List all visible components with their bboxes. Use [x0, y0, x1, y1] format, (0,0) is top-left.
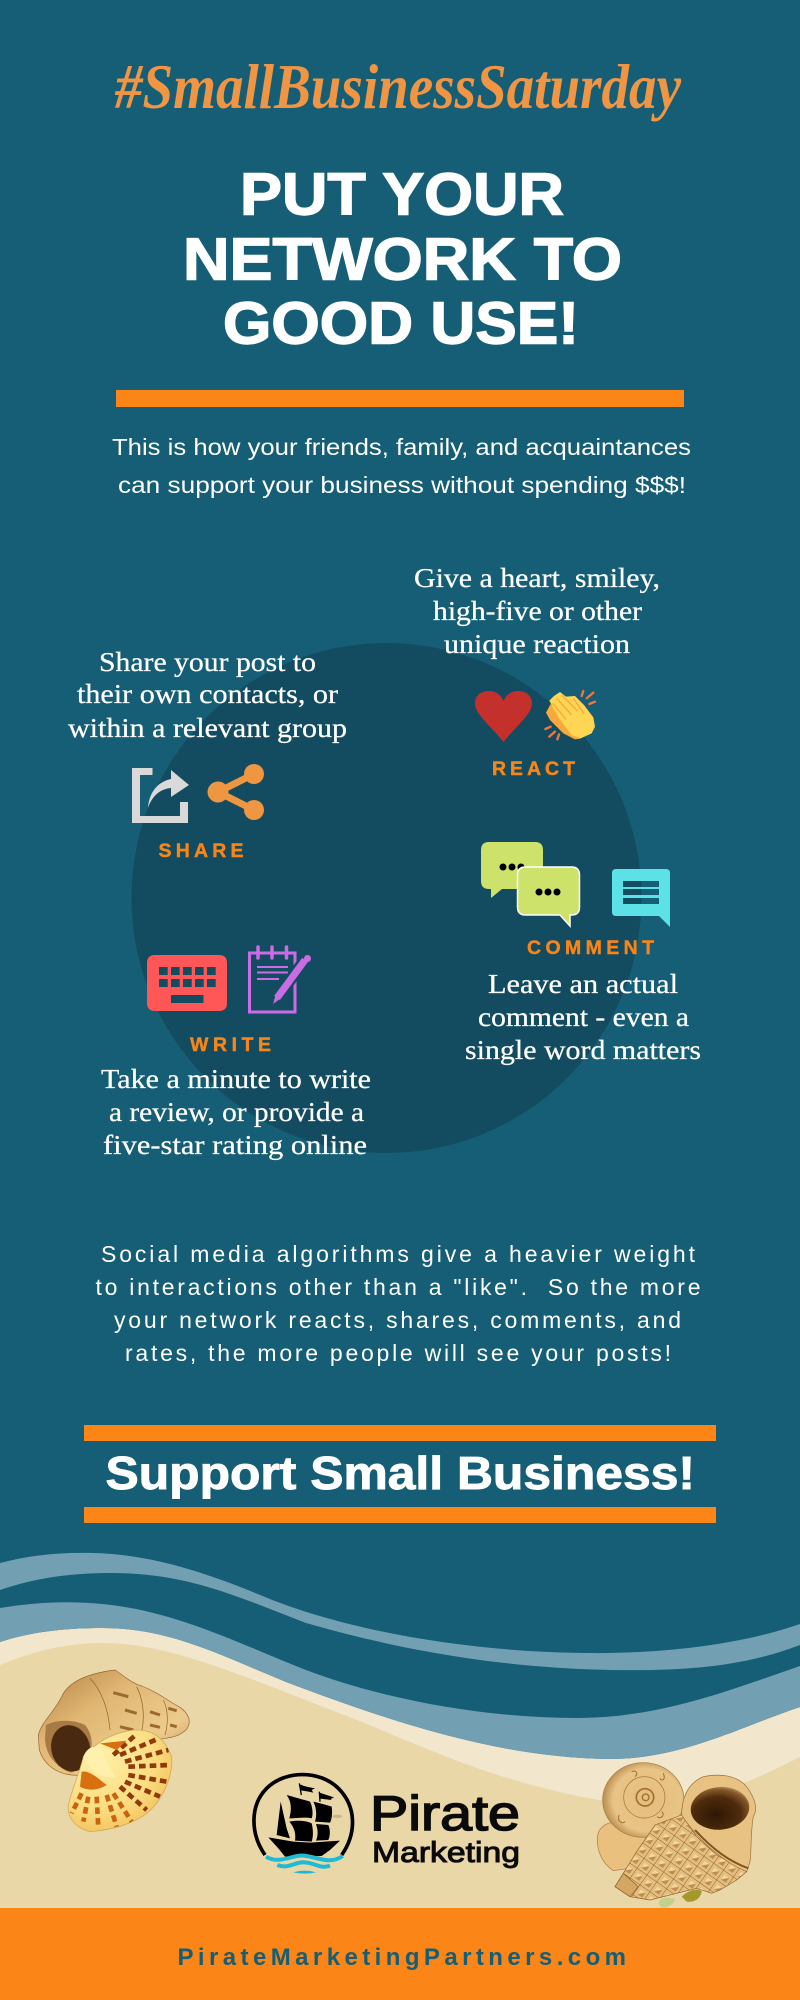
- logo: Pirate Marketing: [254, 1775, 520, 1874]
- panel: comment: [465, 842, 701, 1065]
- title divider: [116, 390, 684, 407]
- hashtag heading: #SmallBusinessSaturday: [114, 51, 682, 122]
- write description: [101, 1064, 371, 1160]
- icon: heart: [475, 691, 532, 742]
- comment description: single word matters: [465, 1035, 701, 1065]
- write description: a review, or provide a: [109, 1097, 364, 1127]
- algorithm explanation text: Social media algorithms give a heavier weight: [101, 1241, 696, 1267]
- shell: left snail and clam: [38, 1670, 189, 1832]
- comment description: comment - even a: [478, 1002, 689, 1032]
- react description: high-five or other: [433, 596, 642, 626]
- share label: SHARE: [158, 840, 244, 862]
- algorithm explanation text: rates, the more people will see your posts!: [125, 1340, 671, 1366]
- comment description: Leave an actual: [488, 969, 678, 999]
- share description: [68, 647, 347, 743]
- icon: notepad and pencil: [250, 947, 311, 1012]
- react description: Give a heart, smiley,: [414, 563, 660, 593]
- panel: share: [68, 647, 347, 862]
- lower blue wave: [0, 1602, 800, 1759]
- react label: REACT: [492, 758, 575, 780]
- share description: their own contacts, or: [77, 679, 338, 709]
- beach waves: [0, 1553, 800, 1910]
- algorithm explanation text: your network reacts, shares, comments, and: [114, 1307, 681, 1333]
- title: GOOD USE!: [223, 290, 579, 356]
- react description: unique reaction: [444, 629, 631, 659]
- comment label: COMMENT: [527, 937, 654, 959]
- support banner: [84, 1425, 716, 1523]
- react description: [414, 563, 660, 659]
- write description: five-star rating online: [103, 1130, 367, 1160]
- logo wordmark: [370, 1787, 520, 1869]
- intro text: This is how your friends, family, and acquaintances: [112, 434, 691, 460]
- foam: [0, 1628, 800, 1910]
- write label: WRITE: [190, 1034, 271, 1056]
- share description: within a relevant group: [68, 713, 347, 743]
- title: NETWORK TO: [183, 226, 622, 292]
- algorithm explanation text: [96, 1241, 700, 1366]
- share description: Share your post to: [99, 647, 316, 677]
- support banner: Support Small Business!: [106, 1447, 695, 1499]
- sand: [0, 1643, 800, 1910]
- upper blue wave: [0, 1553, 800, 1670]
- logo emblem: ship: [254, 1775, 353, 1874]
- intro text: can support your business without spending $$$!: [118, 472, 686, 498]
- panel: react: [414, 563, 660, 780]
- algorithm explanation text: to interactions other than a "like". So the more: [96, 1274, 700, 1300]
- icon: blue speech bubble: [612, 869, 670, 927]
- title: [183, 162, 622, 356]
- panel: write: [101, 947, 371, 1160]
- central circle: [132, 643, 642, 1153]
- shell: right conch pair: [597, 1763, 756, 1908]
- logo wordmark: Marketing: [372, 1837, 520, 1869]
- comment description: [465, 969, 701, 1065]
- logo wordmark: Pirate: [370, 1787, 520, 1841]
- icon: green speech bubbles: [481, 842, 580, 926]
- title: PUT YOUR: [240, 162, 564, 228]
- write description: Take a minute to write: [101, 1064, 371, 1094]
- footer website: PirateMarketingPartners.com: [178, 1944, 626, 1971]
- intro text: [112, 434, 691, 498]
- icon: clapping hands: [545, 691, 595, 739]
- icon: share nodes: [208, 764, 264, 820]
- footer band: [0, 1908, 800, 2000]
- icon: keyboard: [147, 955, 227, 1011]
- icon: export arrow: [132, 768, 189, 823]
